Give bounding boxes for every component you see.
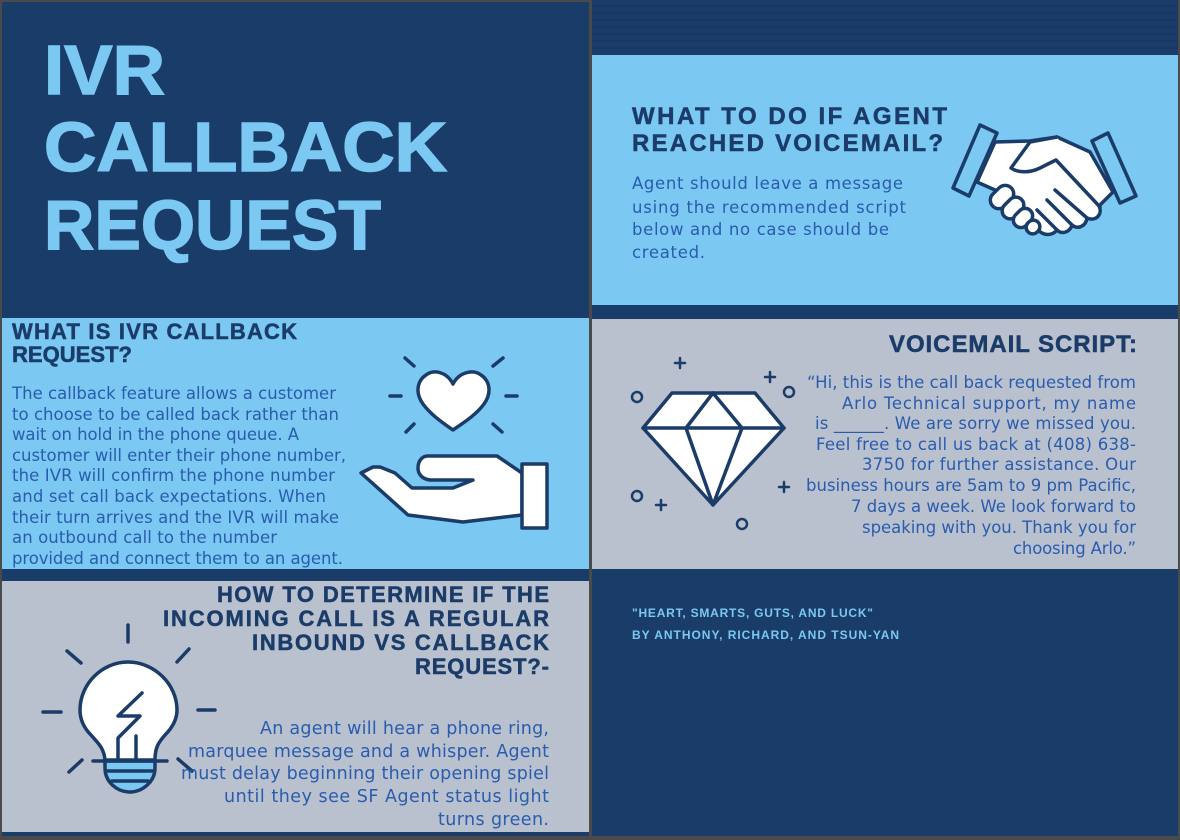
text: callback feature description: provided and connect them to an agent.	[12, 549, 343, 568]
text: agent hears phone ring: must delay beginning their opening spiel	[181, 764, 549, 784]
panel: credits	[592, 569, 1178, 836]
text: leave a message: Agent should leave a message	[632, 174, 903, 193]
text: callback feature description: the IVR will confirm the phone number	[12, 466, 335, 485]
heading: how to determine: INCOMING CALL IS A REGULAR	[163, 606, 549, 631]
panel: voicemail advice	[592, 55, 1178, 305]
text: voicemail script body: Arlo Technical support, my name	[842, 394, 1136, 413]
text: voicemail script body: Feel free to call us back at (408) 638-	[816, 435, 1136, 454]
text: agent hears phone ring: An agent will hear a phone ring,	[260, 719, 549, 739]
text: voicemail script body: choosing Arlo.”	[1013, 539, 1136, 558]
heading: how to determine: INBOUND VS CALLBACK	[252, 630, 549, 655]
text: callback feature description: to choose to be called back rather than	[12, 405, 339, 424]
heading: how to determine: HOW TO DETERMINE IF THE	[217, 582, 549, 607]
heading: voicemail script: VOICEMAIL SCRIPT:	[889, 331, 1137, 358]
title: IVR	[44, 31, 165, 109]
text: leave a message	[632, 174, 907, 262]
text: callback feature description: The callback feature allows a customer	[11, 384, 336, 403]
icon: handshake	[953, 125, 1136, 237]
text: voicemail script body: “Hi, this is the call back requested from	[807, 373, 1136, 392]
title	[44, 31, 447, 264]
title: CALLBACK	[44, 108, 447, 186]
panel: title	[2, 2, 589, 318]
heading: what to do if agent reached voicemail: REACHED VOICEMAIL?	[632, 130, 943, 157]
text: voicemail script body	[806, 373, 1136, 558]
text: callback feature description	[11, 384, 346, 568]
heading: what is IVR callback request	[12, 319, 297, 367]
heading: what to do if agent reached voicemail: WHAT TO DO IF AGENT	[632, 103, 947, 130]
text: callback feature description: customer will enter their phone number,	[12, 446, 346, 465]
text: credits: "HEART, SMARTS, GUTS, AND LUCK"	[632, 606, 873, 620]
text: callback feature description: an outbound call to the number	[12, 528, 277, 547]
icon: light bulb	[43, 625, 215, 792]
heading: what to do if agent reached voicemail	[632, 103, 947, 157]
text: leave a message: created.	[632, 243, 705, 262]
text: agent hears phone ring: turns green.	[438, 810, 549, 830]
text: credits	[632, 606, 899, 642]
text: voicemail script body: speaking with you. Thank you for	[862, 518, 1136, 537]
text: voicemail script body: is ______. We are sorry we missed you.	[815, 414, 1136, 434]
text: leave a message: below and no case should be	[632, 220, 889, 239]
text: callback feature description: their turn arrives and the IVR will make	[12, 508, 339, 527]
text: callback feature description: wait on hold in the phone queue. A	[12, 425, 300, 444]
text: agent hears phone ring: until they see SF Agent status light	[224, 787, 549, 807]
text: voicemail script body: 7 days a week. We look forward to	[851, 497, 1136, 516]
panel: voicemail script	[592, 319, 1178, 569]
text: callback feature description: and set call back expectations. When	[12, 487, 326, 506]
text: voicemail script body: business hours are 5am to 9 pm Pacific,	[806, 476, 1136, 495]
heading: what is IVR callback request: WHAT IS IVR CALLBACK	[12, 319, 297, 344]
panel: top stripes	[592, 0, 1178, 55]
text: credits: BY ANTHONY, RICHARD, AND TSUN-YAN	[632, 628, 899, 642]
heading: how to determine: REQUEST?-	[415, 654, 549, 679]
panel: what is IVR callback request	[2, 318, 589, 569]
heading: what is IVR callback request: REQUEST?	[12, 342, 132, 367]
text: agent hears phone ring	[181, 719, 549, 830]
text: agent hears phone ring: marquee message and a whisper. Agent	[188, 742, 549, 762]
panel: how to determine inbound vs callback	[2, 581, 589, 832]
text: voicemail script body: 3750 for further assistance. Our	[862, 455, 1136, 474]
text: leave a message: using the recommended script	[632, 198, 907, 217]
heading: how to determine	[163, 582, 549, 679]
title: REQUEST	[44, 186, 381, 264]
icon: diamond	[632, 358, 794, 529]
icon: hand holding heart	[361, 358, 547, 528]
